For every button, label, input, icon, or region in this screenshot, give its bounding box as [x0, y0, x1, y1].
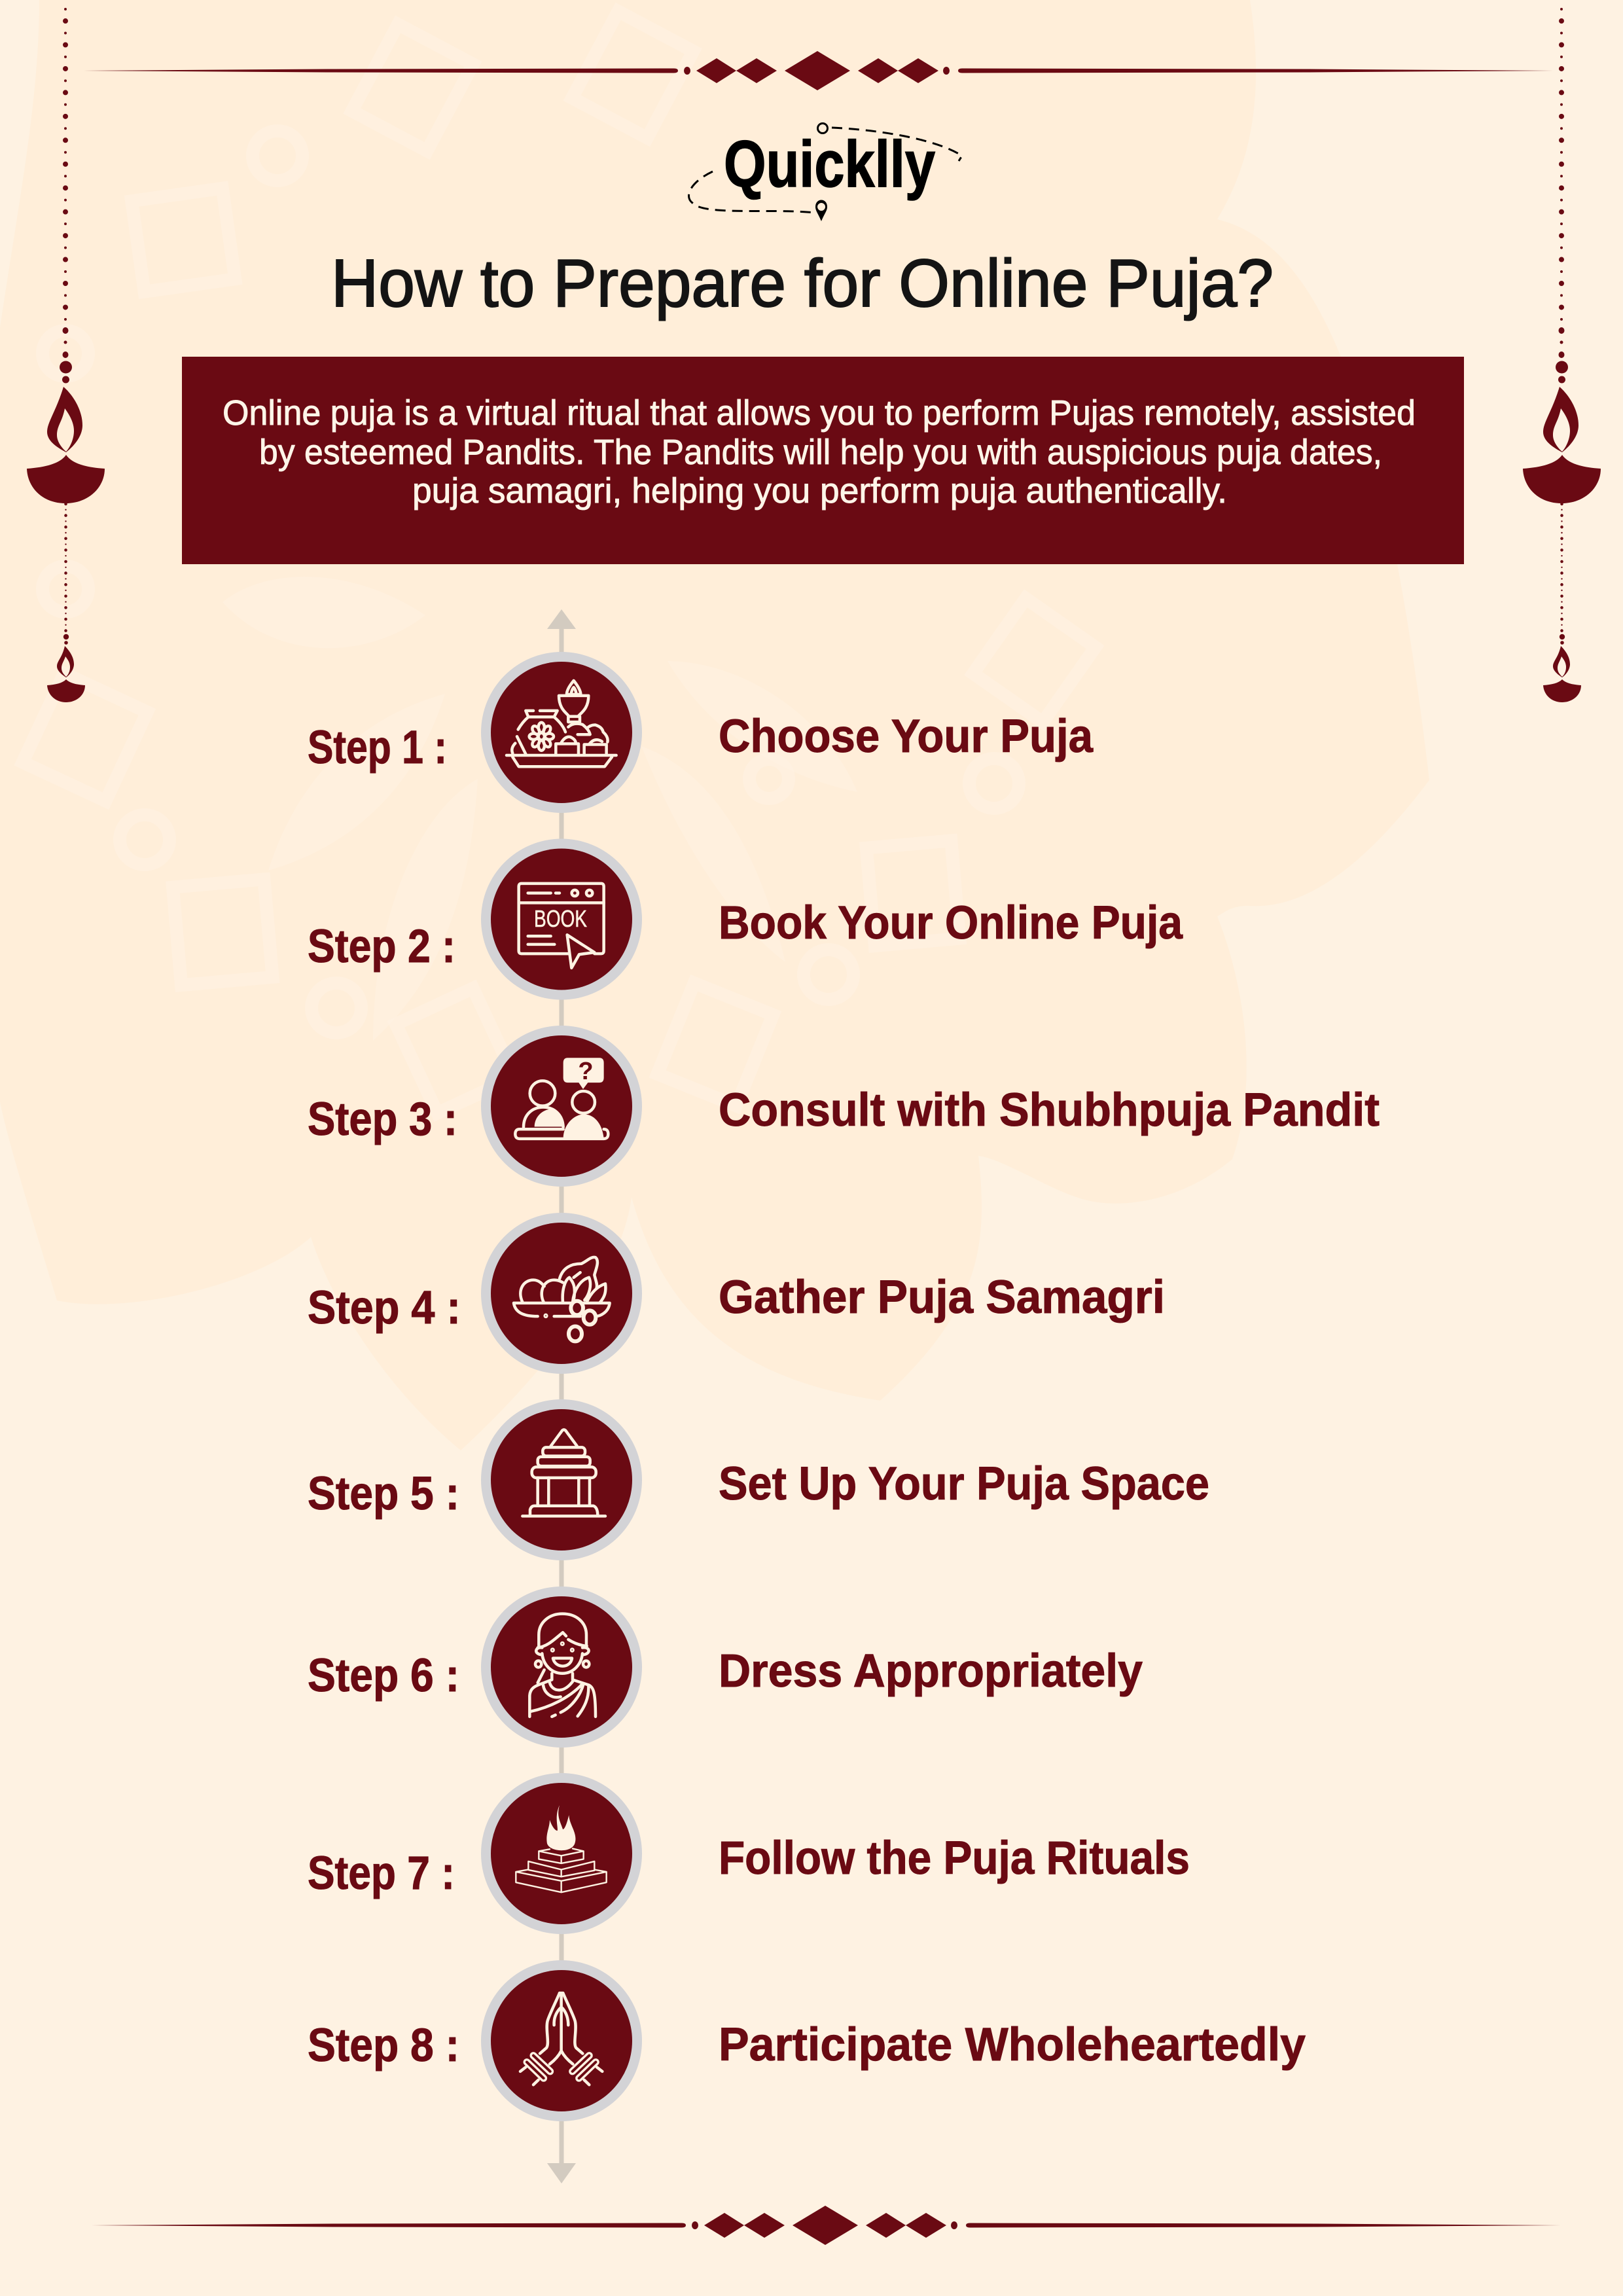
step 5 text: Set Up Your Puja Space — [719, 1458, 1209, 1510]
step 4 — [308, 1213, 1165, 1374]
step 7 badge — [481, 1773, 642, 1934]
intro text: Online puja is a virtual ritual that allows you to perform Pujas remotely, assisted — [223, 393, 1416, 433]
BOOK label: BOOK — [534, 905, 587, 932]
step 1 label: Step 1 : — [308, 722, 447, 774]
icon: woman in saree — [529, 1614, 596, 1717]
step 2 badge — [481, 839, 642, 1000]
step 2 — [308, 839, 1183, 1000]
step 2 text: Book Your Online Puja — [719, 897, 1183, 949]
icon: online booking window — [519, 884, 604, 968]
step 7 — [308, 1773, 1190, 1934]
title: How to Prepare for Online Puja? — [331, 245, 1274, 321]
step 1 — [308, 652, 1093, 813]
step 6 text: Dress Appropriately — [719, 1645, 1143, 1697]
step 4 text: Gather Puja Samagri — [719, 1272, 1165, 1323]
step 7 label: Step 7 : — [308, 1848, 455, 1899]
intro text — [223, 393, 1416, 511]
timeline spine with arrows — [547, 609, 576, 2183]
icon: consultation with pandit — [515, 1058, 608, 1139]
logo: Quicklly with dashed route — [689, 123, 962, 221]
step 8 text: Participate Wholeheartedly — [719, 2019, 1306, 2071]
step 3 — [308, 1026, 1380, 1187]
step 6 badge — [481, 1587, 642, 1748]
step 5 badge — [481, 1399, 642, 1560]
step 2 label: Step 2 : — [308, 921, 455, 973]
icon: puja thali — [507, 681, 616, 766]
left hanging lamps — [27, 0, 105, 702]
step 4 label: Step 4 : — [308, 1282, 461, 1334]
step 3 text: Consult with Shubhpuja Pandit — [719, 1085, 1380, 1136]
icon: temple — [522, 1429, 605, 1516]
step 4 badge — [481, 1213, 642, 1374]
step 1 badge — [481, 652, 642, 813]
step 8 label: Step 8 : — [308, 2020, 459, 2072]
bottom ornamental divider — [92, 2206, 1561, 2245]
step 8 — [308, 1960, 1306, 2121]
question mark: ? — [578, 1058, 594, 1085]
step 6 — [308, 1587, 1143, 1748]
icon: samagri plate — [514, 1257, 610, 1341]
step 3 label: Step 3 : — [308, 1094, 457, 1145]
right hanging lamps — [1523, 0, 1601, 702]
step 5 label: Step 5 : — [308, 1468, 459, 1520]
step 6 label: Step 6 : — [308, 1650, 459, 1702]
step 5 — [308, 1399, 1209, 1560]
intro panel — [182, 357, 1464, 564]
step 1 text: Choose Your Puja — [719, 711, 1093, 762]
top ornamental divider — [84, 51, 1553, 90]
step 7 text: Follow the Puja Rituals — [719, 1833, 1190, 1884]
icon: namaste hands — [520, 1993, 602, 2085]
icon: havan fire altar — [516, 1805, 607, 1892]
intro text: puja samagri, helping you perform puja authentically. — [412, 471, 1227, 511]
logo: Quicklly with dashed route: Quicklly — [724, 128, 935, 201]
step 3 badge — [481, 1026, 642, 1187]
intro text: by esteemed Pandits. The Pandits will help you with auspicious puja dates, — [259, 433, 1382, 472]
step 8 badge — [481, 1960, 642, 2121]
